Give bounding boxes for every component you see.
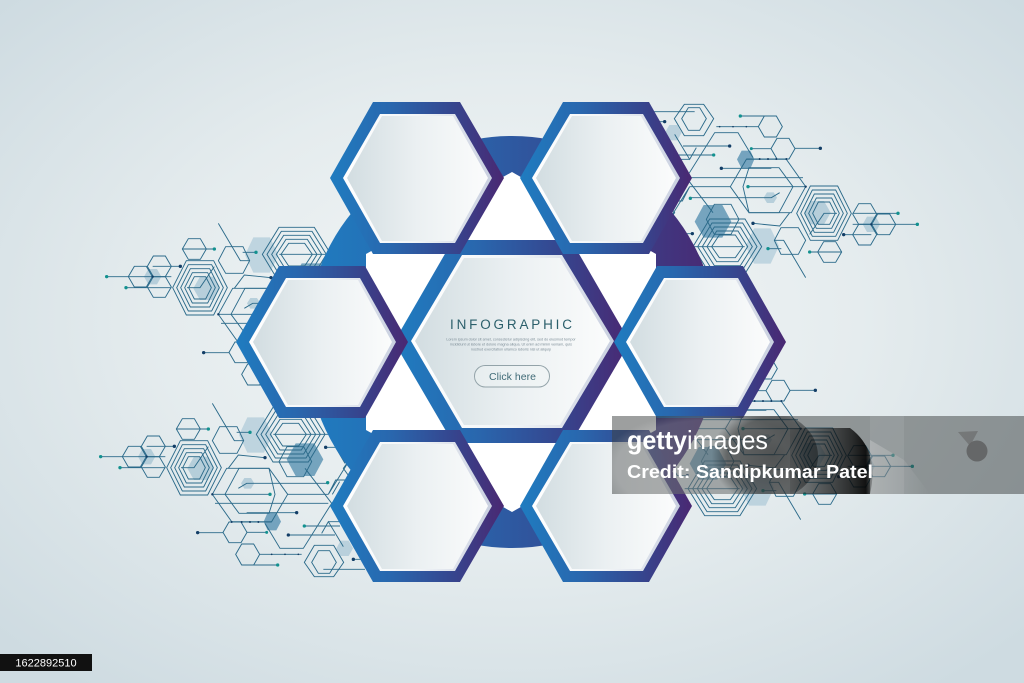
watermark credit: Credit: Sandipkumar Patel <box>627 461 873 482</box>
panel: top right hexagon <box>520 102 692 254</box>
heading: infographic: INFOGRAPHIC <box>450 317 572 332</box>
backing circle <box>306 136 718 548</box>
button: click here <box>474 366 550 387</box>
text block: lorem ipsum <box>446 338 576 352</box>
text block: lorem ipsum: incididunt ut labore et dolore magna aliqua. Ut enim ad minim veniam, quis <box>450 342 572 346</box>
image id tag <box>0 654 92 671</box>
white backing hexagon <box>366 172 656 512</box>
panel: top left hexagon <box>330 102 504 254</box>
network pattern: bottom left <box>99 403 365 577</box>
watermark bar <box>612 416 1024 494</box>
panel: centre hexagon <box>394 240 630 443</box>
network pattern: top right <box>653 104 919 278</box>
network pattern: bottom right <box>648 346 914 520</box>
network pattern: middle left <box>105 223 371 397</box>
text block: lorem ipsum: Lorem ipsum dolor sit amet, consectetur adipiscing elit, sed do eiusmod tempor <box>446 338 576 342</box>
panel: bottom right hexagon <box>520 430 692 582</box>
panel: middle right hexagon <box>614 266 786 418</box>
watermark logo: gettyimages <box>627 425 768 455</box>
text block: lorem ipsum: nostrud exercitation ullamco laboris nisi ut aliquip <box>471 348 551 352</box>
panel: middle left hexagon <box>236 266 408 418</box>
panel: bottom left hexagon <box>330 430 504 582</box>
button: click here: Click here <box>489 371 536 383</box>
image id tag: 1622892510 <box>15 658 77 670</box>
